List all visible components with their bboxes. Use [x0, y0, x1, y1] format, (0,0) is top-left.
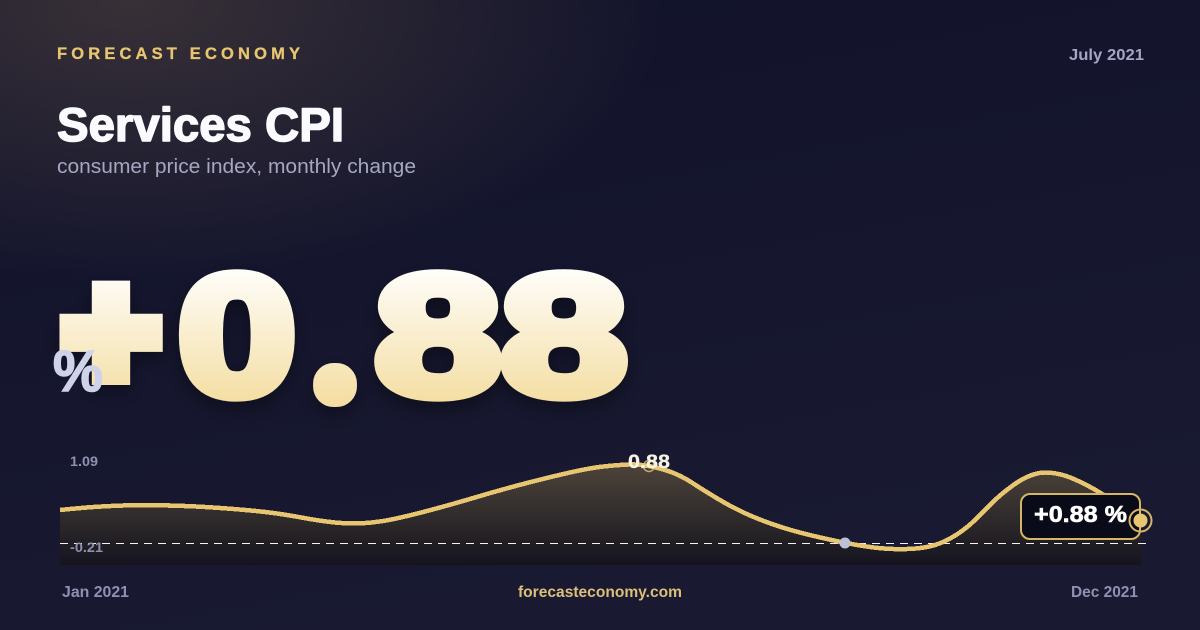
value callout: +0.88 %: [1034, 501, 1127, 527]
zero baseline: [60, 542, 1147, 544]
value callout: [1021, 494, 1140, 539]
low marker: [840, 538, 850, 548]
trend line: [60, 464, 1140, 549]
peak marker: [644, 460, 654, 472]
big value: 0: [178, 241, 296, 431]
brand label: FORECAST ECONOMY: [57, 45, 300, 63]
peak label: 0.88: [628, 451, 670, 473]
source url: forecasteconomy.com: [518, 584, 682, 601]
end marker: [1130, 510, 1152, 532]
subtitle: consumer price index, monthly change: [57, 156, 416, 178]
big value: [63, 239, 627, 431]
percent sign: %: [53, 339, 103, 404]
axis min label: -0.21: [70, 539, 103, 555]
big value: .: [332, 370, 338, 392]
sparkline chart: [60, 451, 1152, 565]
big value: 88: [375, 241, 627, 431]
title: Services CPI: [57, 98, 344, 151]
start date: Jan 2021: [62, 584, 129, 601]
axis max label: 1.09: [70, 453, 98, 469]
area fill: [60, 464, 1141, 565]
date: July 2021: [1069, 47, 1144, 64]
end date: Dec 2021: [1071, 584, 1138, 601]
big value: +: [63, 239, 159, 424]
